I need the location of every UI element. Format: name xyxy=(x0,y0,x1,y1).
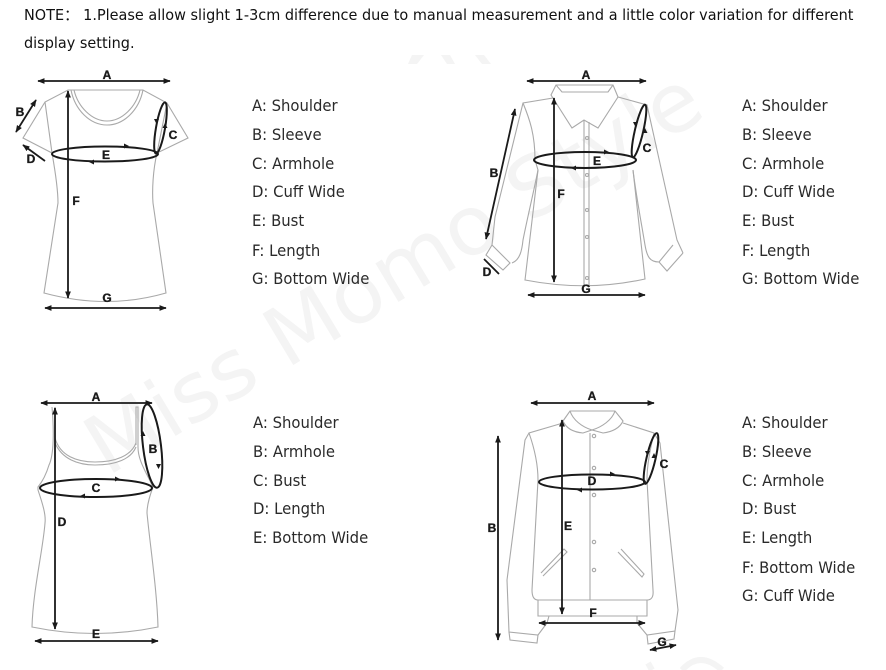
measurement list: jacket: G: Cuff Wide xyxy=(742,586,835,605)
measurement list: t-shirt: E: Bust xyxy=(252,211,304,230)
measurement list: shirt: F: Length xyxy=(742,241,810,260)
measurement list: shirt: G: Bottom Wide xyxy=(742,269,859,288)
garment diagram: t-shirt xyxy=(16,68,188,308)
measurement list: tank top: C: Bust xyxy=(253,471,306,490)
measurement list: t-shirt xyxy=(252,96,369,288)
garment diagram: baseball jacket: C xyxy=(660,457,669,471)
measurement list: t-shirt: C: Armhole xyxy=(252,154,334,173)
measurement list: shirt: D: Cuff Wide xyxy=(742,182,835,201)
garment diagram: tank top: D xyxy=(58,515,67,529)
garment diagram: shirt: C xyxy=(643,141,652,155)
garment diagram: shirt xyxy=(483,68,683,296)
measurement list: shirt: E: Bust xyxy=(742,211,794,230)
garment diagram: tank top: C xyxy=(92,481,101,495)
garment diagram: t-shirt: E xyxy=(102,148,110,162)
measurement list: jacket: C: Armhole xyxy=(742,471,824,490)
measurement list: t-shirt: F: Length xyxy=(252,241,320,260)
measurement list: tank top: A: Shoulder xyxy=(253,413,339,432)
garment diagram: tank top: E xyxy=(92,627,100,641)
garment diagram: t-shirt: G xyxy=(102,291,112,305)
note text: display setting. xyxy=(24,34,135,52)
garment diagram: shirt: E xyxy=(593,154,601,168)
garment diagram: t-shirt: D xyxy=(27,152,36,166)
garment diagram: baseball jacket: B xyxy=(488,521,497,535)
garment diagram: tank top xyxy=(32,390,166,641)
watermark: Miss Momo Style xyxy=(68,50,719,494)
measurement list: jacket xyxy=(742,413,855,605)
measurement list: t-shirt: B: Sleeve xyxy=(252,125,322,144)
garment diagram: t-shirt: A xyxy=(103,68,112,82)
garment diagram: t-shirt: F xyxy=(72,194,80,208)
garment diagram: baseball jacket: E xyxy=(564,519,572,533)
measurement list: shirt: A: Shoulder xyxy=(742,96,828,115)
measurement list: jacket: E: Length xyxy=(742,528,812,547)
measurement list: tank top: B: Armhole xyxy=(253,442,335,461)
measurement list: tank top xyxy=(253,413,368,547)
garment diagram: tank top: A xyxy=(92,390,101,404)
measurement list: shirt: B: Sleeve xyxy=(742,125,812,144)
garment diagram: tank top: B xyxy=(149,442,158,456)
measurement list: jacket: B: Sleeve xyxy=(742,442,812,461)
measurement list: shirt: C: Armhole xyxy=(742,154,824,173)
note text xyxy=(24,6,854,52)
garment diagram: shirt: B xyxy=(490,166,499,180)
garment diagram: baseball jacket: A xyxy=(588,389,597,403)
garment diagram: shirt: G xyxy=(581,282,591,296)
note text: NOTE： 1.Please allow slight 1-3cm difference due to manual measurement and a little color variation for different xyxy=(24,6,853,24)
garment diagram: baseball jacket xyxy=(488,389,678,650)
measurement list: jacket: A: Shoulder xyxy=(742,413,828,432)
measurement list: tank top: E: Bottom Wide xyxy=(253,528,368,547)
garment diagram: shirt: F xyxy=(557,187,565,201)
garment diagram: t-shirt: B xyxy=(16,105,25,119)
measurement list: jacket: D: Bust xyxy=(742,499,796,518)
garment diagram: shirt: A xyxy=(582,68,591,82)
measurement list: tank top: D: Length xyxy=(253,499,325,518)
measurement list: t-shirt: D: Cuff Wide xyxy=(252,182,345,201)
measurement list: t-shirt: A: Shoulder xyxy=(252,96,338,115)
garment diagram: t-shirt: C xyxy=(169,128,178,142)
garment diagram: baseball jacket: F xyxy=(589,606,597,620)
garment diagram: baseball jacket: G xyxy=(657,635,667,649)
garment diagram: shirt: D xyxy=(483,265,492,279)
garment diagram: baseball jacket: D xyxy=(588,474,597,488)
measurement list: shirt xyxy=(742,96,859,288)
measurement list: t-shirt: G: Bottom Wide xyxy=(252,269,369,288)
measurement list: jacket: F: Bottom Wide xyxy=(742,558,855,577)
